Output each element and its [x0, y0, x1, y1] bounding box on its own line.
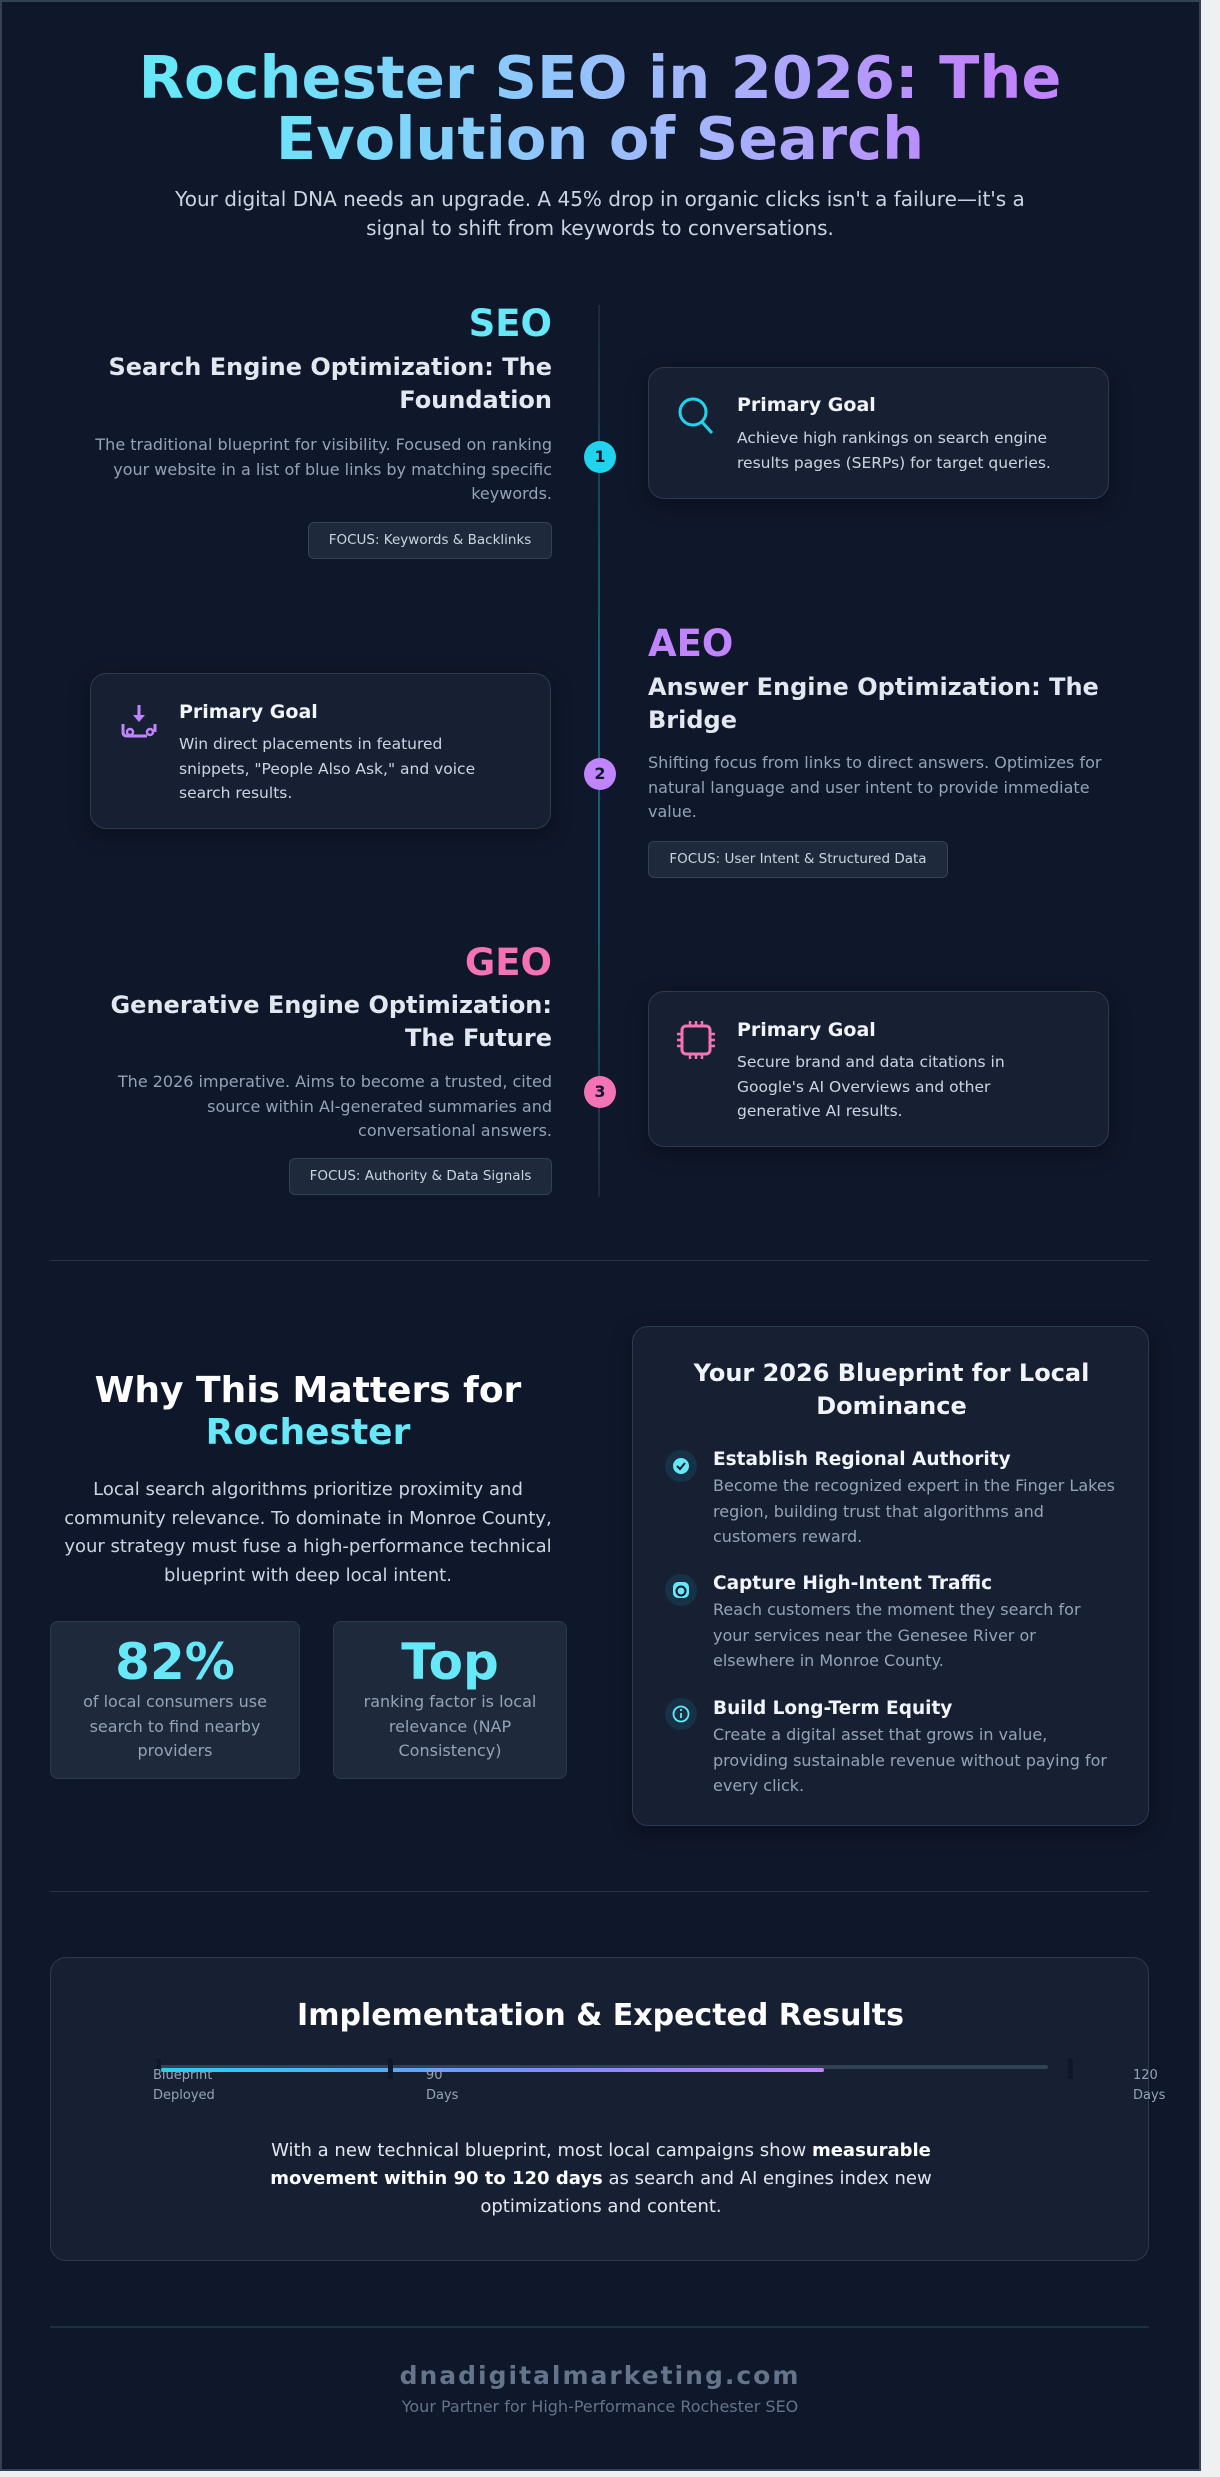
icon: download arrow: [122, 705, 156, 738]
item: traffic: Capture High-Intent Traffic: [713, 1573, 992, 1594]
stat: Top: ranking factor is local relevance (NAP Consistency): [364, 1692, 536, 1760]
title: Rochester SEO in 2026: The: [139, 43, 1061, 112]
text: Generative Engine Optimization: The Future: [110, 991, 552, 1052]
marker 1: [584, 441, 616, 473]
text: AEO: [648, 622, 733, 665]
progress bar: Deployed: [153, 2088, 215, 2103]
stat: 82%: 82%: [115, 1633, 235, 1691]
subtitle: Your digital DNA needs an upgrade. A 45% drop in organic clicks isn't a failure—it's a signal to shift from keywords to conversations.: [175, 187, 1025, 240]
progress bar: Days: [426, 2088, 458, 2103]
progress bar: Days: [1133, 2088, 1165, 2103]
progress bar: Blueprint: [153, 2068, 212, 2083]
title: Evolution of Search: [276, 104, 924, 173]
panel: implementation: [50, 1957, 1149, 2261]
text: The traditional blueprint for visibility. Focused on ranking your website in a list of blue links by matching specific keywords.: [95, 435, 552, 503]
item: authority: Establish Regional Authority: [713, 1449, 1011, 1470]
card: AEO goal: [90, 673, 551, 829]
panel: blueprint: [632, 1326, 1149, 1826]
marker 3: [584, 1076, 616, 1108]
card: SEO goal: Primary Goal: [737, 394, 876, 416]
progress bar: 90: [426, 2068, 443, 2083]
why paragraph: Local search algorithms prioritize proximity and community relevance. To dominate in Monroe County, your strategy must fuse a high-performance technical blueprint with deep local intent.: [64, 1479, 552, 1586]
results text: With a new technical blueprint, most local campaigns show measurable movement within 90 to 120 days as search and AI engines index new optimizations and content.: [270, 2140, 932, 2217]
card: GEO goal: Primary Goal: [737, 1019, 876, 1041]
icon: info: [665, 1698, 697, 1730]
marker 1: 1: [594, 447, 606, 466]
icon: check: [665, 1450, 697, 1482]
item: equity: Build Long-Term Equity: [713, 1698, 952, 1719]
panel: blueprint: Your 2026 Blueprint for Local Dominance: [694, 1359, 1089, 1420]
text: Answer Engine Optimization: The Bridge: [648, 673, 1099, 734]
stat: Top: Top: [401, 1633, 499, 1691]
AEO block: [648, 622, 1102, 878]
marker 2: [584, 758, 616, 790]
text: FOCUS: Keywords & Backlinks: [329, 532, 531, 548]
item: authority: Become the recognized expert in the Finger Lakes region, building trust that algorithms and customers reward.: [713, 1476, 1115, 1546]
text: FOCUS: User Intent & Structured Data: [669, 851, 927, 867]
stat: Top: [333, 1621, 567, 1779]
marker 3: 3: [594, 1082, 606, 1101]
text: Search Engine Optimization: The Foundation: [108, 353, 552, 414]
progress bar: [153, 2059, 1165, 2103]
why heading: Why This Matters for Rochester: [95, 1370, 521, 1453]
card: AEO goal: Primary Goal: [179, 701, 318, 723]
card: SEO goal: Achieve high rankings on search engine results pages (SERPs) for target queries.: [737, 429, 1051, 472]
icon: target: [665, 1574, 697, 1606]
card: GEO goal: [648, 991, 1109, 1147]
marker 2: 2: [594, 764, 606, 783]
text: GEO: [465, 941, 552, 984]
heading: Implementation & Expected Results: [297, 1998, 904, 2033]
stat: 82%: of local consumers use search to find nearby providers: [83, 1692, 267, 1760]
footer tagline: Your Partner for High-Performance Rochester SEO: [402, 2397, 798, 2416]
text: Shifting focus from links to direct answers. Optimizes for natural language and user intent to provide immediate value.: [648, 753, 1101, 821]
footer brand: dnadigitalmarketing.com: [400, 2361, 800, 2390]
card: SEO goal: [648, 367, 1109, 499]
card: GEO goal: Secure brand and data citations in Google's AI Overviews and other generative AI results.: [737, 1053, 1005, 1120]
GEO block: [110, 941, 552, 1195]
icon: chip: [677, 1021, 715, 1059]
item: equity: Create a digital asset that grows in value, providing sustainable revenue without paying for every click.: [713, 1725, 1107, 1795]
timeline line: [598, 305, 600, 1197]
stat: 82%: [50, 1621, 300, 1779]
card: AEO goal: Win direct placements in featured snippets, "People Also Ask," and voice search results.: [179, 735, 475, 802]
item: traffic: Reach customers the moment they search for your services near the Genesee River or elsewhere in Monroe County.: [713, 1600, 1081, 1670]
title: [60, 47, 1140, 169]
progress bar: 120: [1133, 2068, 1158, 2083]
text: The 2026 imperative. Aims to become a trusted, cited source within AI-generated summaries and conversational answers.: [118, 1072, 552, 1140]
icon: magnifier: [678, 398, 713, 434]
text: FOCUS: Authority & Data Signals: [310, 1168, 531, 1184]
text: SEO: [469, 302, 552, 345]
SEO block: [95, 302, 552, 559]
